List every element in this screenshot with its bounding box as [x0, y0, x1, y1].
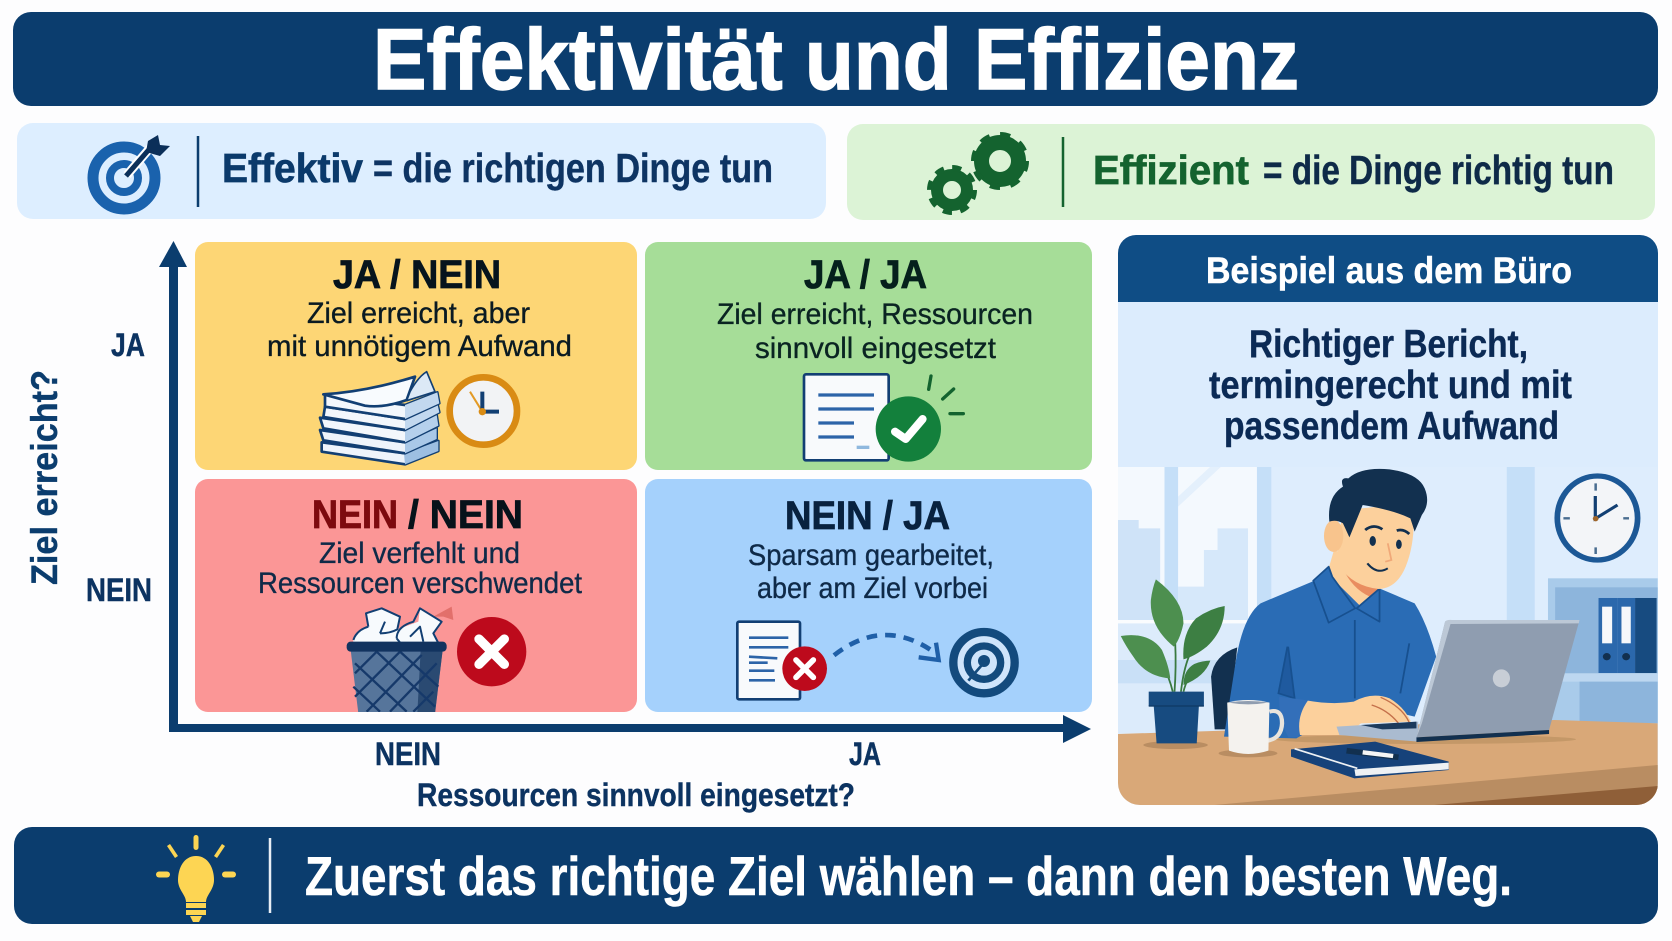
icon: target: [953, 632, 1015, 693]
icon: document with x: [737, 622, 827, 699]
description: mit unnötigem Aufwand: [267, 330, 572, 363]
shelf with binders: [1548, 578, 1658, 723]
description: Ressourcen verschwendet: [258, 567, 583, 600]
effizient text: [1093, 147, 1614, 193]
x axis title: Ressourcen sinnvoll eingesetzt?: [417, 777, 855, 813]
example text: Richtiger Bericht,: [1249, 323, 1528, 366]
description: Ziel verfehlt und: [319, 537, 520, 570]
description: [717, 298, 1033, 365]
x axis arrow: [169, 715, 1091, 743]
description: [258, 537, 583, 600]
description: Ziel erreicht, aber: [307, 297, 530, 330]
panel: office example: [1118, 235, 1658, 807]
office window: [1118, 467, 1535, 684]
example text: passendem Aufwand: [1224, 405, 1559, 448]
arrow: dashed curve: [834, 635, 939, 660]
description: aber am Ziel vorbei: [757, 572, 988, 605]
title: Effektivität und Effizienz: [373, 12, 1299, 108]
effektiv text: = die richtigen Dinge tun: [373, 145, 773, 191]
title: [13, 12, 1658, 108]
description: [748, 539, 994, 605]
x axis label: NEIN: NEIN: [375, 736, 441, 772]
man: [1224, 469, 1436, 738]
effektiv text: Effektiv: [222, 145, 363, 191]
icon: waste bin: [347, 607, 453, 713]
y axis title: Ziel erreicht?: [24, 370, 65, 585]
example text: [1209, 323, 1572, 448]
icon: red x: [457, 617, 526, 686]
panel: JA / JA: [645, 242, 1092, 470]
icon: gears: [930, 135, 1026, 212]
panel header: Beispiel aus dem Büro: [1206, 250, 1572, 291]
example text: termingerecht und mit: [1209, 364, 1572, 407]
icon: document with check: [804, 374, 963, 462]
panel: effizient definition: [847, 124, 1655, 220]
icon: target with arrow: [93, 135, 170, 209]
desk: [1118, 720, 1658, 807]
x axis label: JA: JA: [849, 736, 881, 772]
description: Sparsam gearbeitet,: [748, 539, 994, 572]
panel: NEIN / NEIN: [195, 479, 637, 713]
y axis label: JA: JA: [111, 327, 145, 363]
heading: / NEIN: [408, 493, 523, 537]
description: sinnvoll eingesetzt: [755, 332, 997, 365]
panel header: [1118, 235, 1658, 302]
heading: [312, 493, 523, 537]
icon: paper stack: [320, 372, 439, 464]
description: [267, 297, 572, 363]
coffee mug: [1227, 700, 1282, 754]
footer banner: [14, 827, 1658, 924]
plant: [1121, 579, 1225, 743]
laptop: [1337, 620, 1580, 742]
illustration: man at desk: [1118, 467, 1658, 807]
panel: effektiv definition: [17, 123, 826, 219]
panel: JA / NEIN: [195, 242, 637, 470]
effektiv text: [222, 145, 773, 191]
heading: JA / JA: [804, 253, 927, 297]
chair: [1211, 647, 1237, 729]
wall clock: [1557, 476, 1638, 560]
y axis arrow: [159, 241, 187, 732]
icon: clock: [450, 377, 517, 445]
effizient text: Effizient: [1093, 147, 1249, 193]
heading: NEIN / JA: [785, 494, 950, 538]
panel: NEIN / JA: [645, 479, 1092, 712]
heading: NEIN: [312, 493, 398, 537]
notebook: [1291, 742, 1449, 778]
description: Ziel erreicht, Ressourcen: [717, 298, 1033, 331]
heading: JA / NEIN: [333, 253, 501, 297]
icon: light bulb: [156, 835, 236, 922]
y axis label: NEIN: NEIN: [86, 572, 152, 608]
